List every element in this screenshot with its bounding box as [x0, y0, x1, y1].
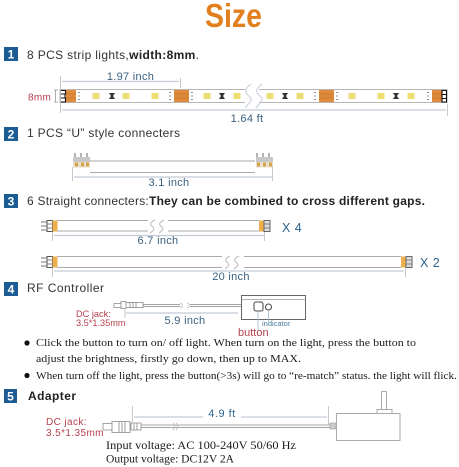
multiplier x4: X 4: [282, 221, 302, 235]
badge 3: 3: [8, 194, 15, 208]
section 1: strip lights: [4, 47, 448, 125]
badge 2: 2: [8, 128, 15, 142]
DC jack and cable: [114, 302, 241, 308]
section 4: RF controller: [4, 281, 457, 382]
8mm dimension: [54, 90, 58, 102]
1.97 inch dimension: [60, 71, 180, 113]
instructions list: [24, 337, 457, 382]
5.9 inch dimension: 5.9 inch: [165, 315, 205, 327]
adapter jack and cable: [103, 422, 330, 432]
multiplier x2: X 2: [420, 256, 440, 270]
4.9 ft dimension: [132, 406, 328, 425]
1.97 inch dimension: 1.97 inch: [107, 71, 154, 83]
heading 4: RF Controller: [27, 281, 104, 295]
DC jack label: 3.5*1.35mm: [46, 428, 104, 439]
DC jack label: [76, 309, 126, 328]
heading 2: 1 PCS “U” style connecters: [27, 126, 180, 140]
cable 6.7 inch: [41, 220, 270, 233]
badge 4: 4: [8, 282, 15, 296]
4.9 ft dimension: 4.9 ft: [208, 408, 236, 420]
DC jack label: DC jack:: [76, 309, 111, 319]
strip diagram: [60, 84, 447, 108]
instructions list: Click the button to turn on/ off light. When turn on the light, press the button to: [36, 337, 417, 349]
3.1 inch dimension: [72, 167, 272, 189]
section 2: U connector: [4, 126, 273, 189]
6.7 inch dimension: [52, 232, 264, 247]
cable 20 inch: [41, 256, 412, 269]
section 5: adapter: [4, 389, 400, 466]
button label: button: [238, 327, 269, 339]
heading 5: Adapter: [28, 389, 76, 403]
badge 2: [4, 127, 18, 142]
badge 1: [4, 47, 18, 62]
6.7 inch dimension: 6.7 inch: [138, 235, 178, 247]
power adapter: [330, 392, 400, 440]
instructions list: When turn off the light, press the button(>3s) will go to “re-match” status. the light will flick.: [36, 370, 457, 382]
badge 5: [4, 389, 17, 404]
20 inch dimension: 20 inch: [212, 271, 250, 283]
badge 4: [4, 282, 18, 296]
DC jack label: 3.5*1.35mm: [76, 318, 126, 328]
heading 3: 6 Straight connecters:They can be combined to cross different gaps.: [27, 194, 425, 208]
8mm label: 8mm: [28, 92, 51, 104]
1.64 ft dimension: 1.64 ft: [231, 113, 263, 125]
heading 1: 8 PCS strip lights,width:8mm.: [27, 48, 199, 62]
5.9 inch dimension: [125, 308, 238, 327]
DC jack label: [46, 417, 104, 439]
instructions list: adjust the brightness, firstly go down, then up to MAX.: [36, 353, 301, 365]
input voltage: Input voltage: AC 100-240V 50/60 Hz: [106, 440, 296, 452]
DC jack label: DC jack:: [46, 417, 87, 428]
U connector diagram: [73, 153, 273, 172]
output voltage: Output voltage: DC12V 2A: [106, 454, 235, 466]
badge 5: 5: [7, 390, 14, 404]
badge 1: 1: [8, 48, 15, 62]
20 inch dimension: [52, 268, 406, 283]
indicator label: indicator: [262, 319, 291, 328]
badge 3: [4, 194, 18, 208]
section 3: straight connectors: [4, 194, 440, 283]
3.1 inch dimension: 3.1 inch: [149, 177, 189, 189]
controller box: [242, 296, 306, 330]
